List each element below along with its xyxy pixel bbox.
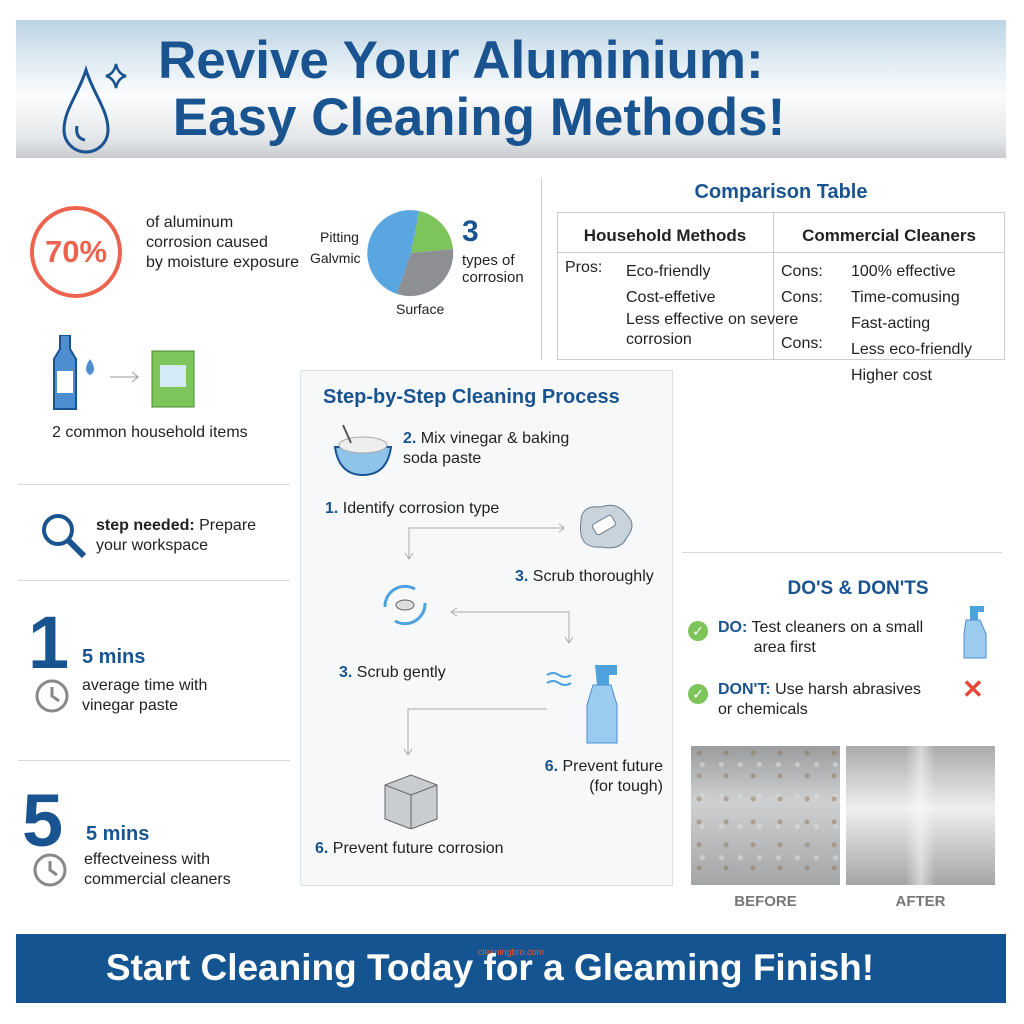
stat: 70%: corrosion caused [146, 234, 268, 251]
title: Revive Your Aluminium: [158, 31, 764, 90]
household items: 2 common household items [52, 424, 248, 441]
do's and don'ts: or chemicals [718, 701, 808, 718]
stat: 5: 5 mins [86, 823, 149, 845]
panel: step-by-step process: 1. Identify corrosion type [325, 500, 499, 517]
comparison table: Higher cost [851, 367, 932, 384]
before/after photos: AFTER [896, 893, 946, 910]
household items [52, 335, 248, 441]
panel: step-by-step process: 3. Scrub gently [339, 664, 446, 681]
comparison table: Eco-friendly [626, 263, 710, 280]
step needed: your workspace [96, 537, 208, 554]
do's and don'ts: DON'T: Use harsh abrasives [718, 681, 921, 698]
stat: 1: 1 [28, 601, 69, 684]
header banner [16, 20, 1006, 158]
comparison table: Fast-acting [851, 315, 930, 332]
panel: step-by-step process: Step-by-Step Cleaning Process [323, 386, 620, 408]
comparison table: Less effective on severe corrosion [626, 311, 798, 348]
step needed [42, 514, 256, 558]
comparison table: Less eco-friendly [851, 341, 972, 358]
stat: 1: 5 mins [82, 646, 145, 668]
panel: step-by-step process [300, 370, 673, 886]
stat: 70%: by moisture exposure [146, 254, 299, 271]
icon: bowl [334, 424, 392, 476]
panel: step-by-step process: 6. Prevent future corrosion [315, 840, 504, 857]
panel: step-by-step process: (for tough) [589, 778, 663, 795]
panel: step-by-step process: 2. Mix vinegar & baking [403, 430, 569, 447]
stat: 70%: of aluminum [146, 214, 233, 231]
before/after photos: BEFORE [734, 893, 797, 910]
icon: water drop [62, 64, 126, 154]
comparison table: Comparison Table [694, 181, 868, 203]
do's and don'ts: DO'S & DON'TS [788, 578, 928, 599]
pie chart: corrosion types: types of [462, 252, 515, 269]
comparison table: Pros: [565, 259, 602, 276]
stat: 70%: 70% [45, 234, 107, 269]
pie chart: corrosion types [310, 210, 524, 317]
do's and don'ts: DO: Test cleaners on a small [718, 619, 923, 636]
before/after photos [691, 746, 995, 910]
stat: 5: 5 [22, 779, 63, 862]
title: Easy Cleaning Methods! [173, 88, 785, 147]
title [158, 31, 785, 147]
stat: 70% [30, 206, 299, 298]
footer banner: Start Cleaning Today for a Gleaming Finish! [106, 947, 874, 988]
panel: step-by-step process: 6. Prevent future [545, 758, 663, 775]
comparison table: Commercial Cleaners [802, 226, 976, 245]
panel: step-by-step process: 3. Scrub thoroughly [515, 568, 654, 585]
panel: step-by-step process: soda paste [403, 450, 481, 467]
pie chart: corrosion types: corrosion [462, 269, 524, 286]
stat: 1 [28, 601, 207, 714]
icon: spray bottle [546, 665, 618, 744]
pie chart: corrosion types: Galvmic [310, 250, 361, 266]
comparison table [557, 181, 1005, 384]
icon: cloth [580, 504, 632, 548]
footer banner [16, 934, 1006, 1003]
comparison table: Household Methods [584, 226, 746, 245]
stat: 1: vinegar paste [82, 697, 178, 714]
stat: 5: commercial cleaners [84, 871, 231, 888]
comparison table: Cons: [781, 263, 823, 280]
icon: circular arrows [384, 584, 426, 626]
pie chart: corrosion types: Pitting [320, 229, 359, 245]
do's and don'ts [688, 578, 986, 718]
comparison table: 100% effective [851, 263, 956, 280]
comparison table: Cons: [781, 335, 823, 352]
do's and don'ts: ✕ [962, 674, 984, 704]
comparison table: Cons: [781, 289, 823, 306]
stat: 5 [22, 779, 231, 888]
icon: box [384, 774, 438, 829]
pie chart: corrosion types: 3 [462, 215, 479, 248]
comparison table: Time-comusing [851, 289, 960, 306]
comparison table: Cost-effetive [626, 288, 716, 306]
pie chart: corrosion types: Surface [396, 301, 444, 317]
do's and don'ts: ✓ [692, 686, 704, 702]
step needed: step needed: Prepare [96, 517, 256, 534]
do's and don'ts: area first [754, 639, 816, 656]
stat: 5: effectveiness with [84, 851, 210, 868]
stat: 1: average time with [82, 677, 207, 694]
do's and don'ts: ✓ [692, 623, 704, 639]
footer banner: cleaningbro.com [478, 947, 544, 957]
